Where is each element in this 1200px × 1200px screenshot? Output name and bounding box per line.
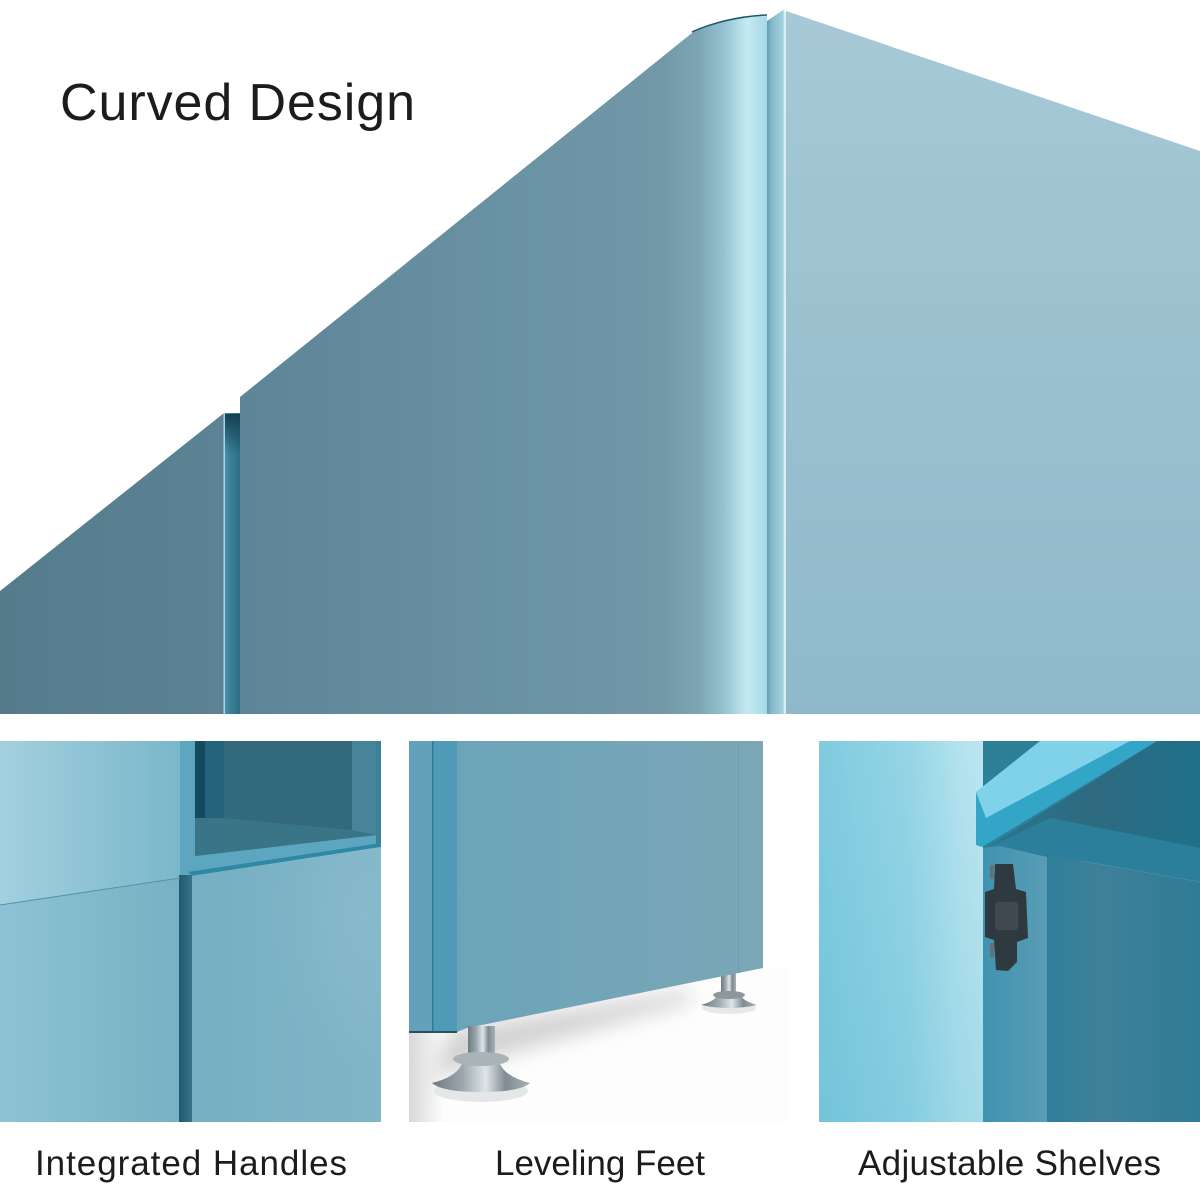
handle lip shadow	[188, 843, 381, 876]
door seam line	[0, 878, 180, 905]
under shelf surface	[983, 741, 1200, 850]
lower door front	[0, 878, 180, 1122]
frame around opening	[180, 741, 381, 876]
rear panel	[1047, 857, 1200, 1122]
curved top edge	[692, 15, 767, 32]
panel: integrated handles photo	[0, 741, 381, 1122]
panel: curved design hero	[0, 10, 1200, 714]
upper rear interior	[983, 741, 1200, 861]
right cabinet side	[786, 11, 1200, 714]
upper door front	[0, 741, 180, 905]
caption: Adjustable Shelves: Adjustable Shelves	[858, 1144, 1161, 1183]
floor	[409, 984, 695, 1122]
right lower door	[192, 847, 381, 1122]
left cabinet door	[0, 413, 224, 714]
main cabinet door with curved corner	[240, 16, 767, 714]
side wall	[819, 741, 983, 1122]
panel: adjustable shelves photo	[819, 741, 1200, 1122]
panel: leveling feet photo	[409, 741, 790, 1122]
front foot	[432, 1026, 530, 1102]
support post	[983, 846, 1047, 1122]
caption: Leveling Feet: Leveling Feet	[495, 1144, 705, 1183]
caption: Integrated Handles: Integrated Handles	[35, 1144, 347, 1183]
title: Curved Design: Curved Design	[60, 74, 415, 132]
shelf	[976, 741, 1157, 847]
back foot	[701, 972, 757, 1014]
cabinet side	[409, 741, 763, 1033]
door highlight	[192, 847, 381, 1122]
open compartment	[195, 741, 381, 856]
recessed handle gap	[224, 413, 240, 714]
shelf bracket	[985, 864, 1028, 971]
vertical handle channel	[179, 875, 192, 1122]
shelf rear band	[983, 818, 1200, 882]
corner seam	[767, 10, 786, 714]
